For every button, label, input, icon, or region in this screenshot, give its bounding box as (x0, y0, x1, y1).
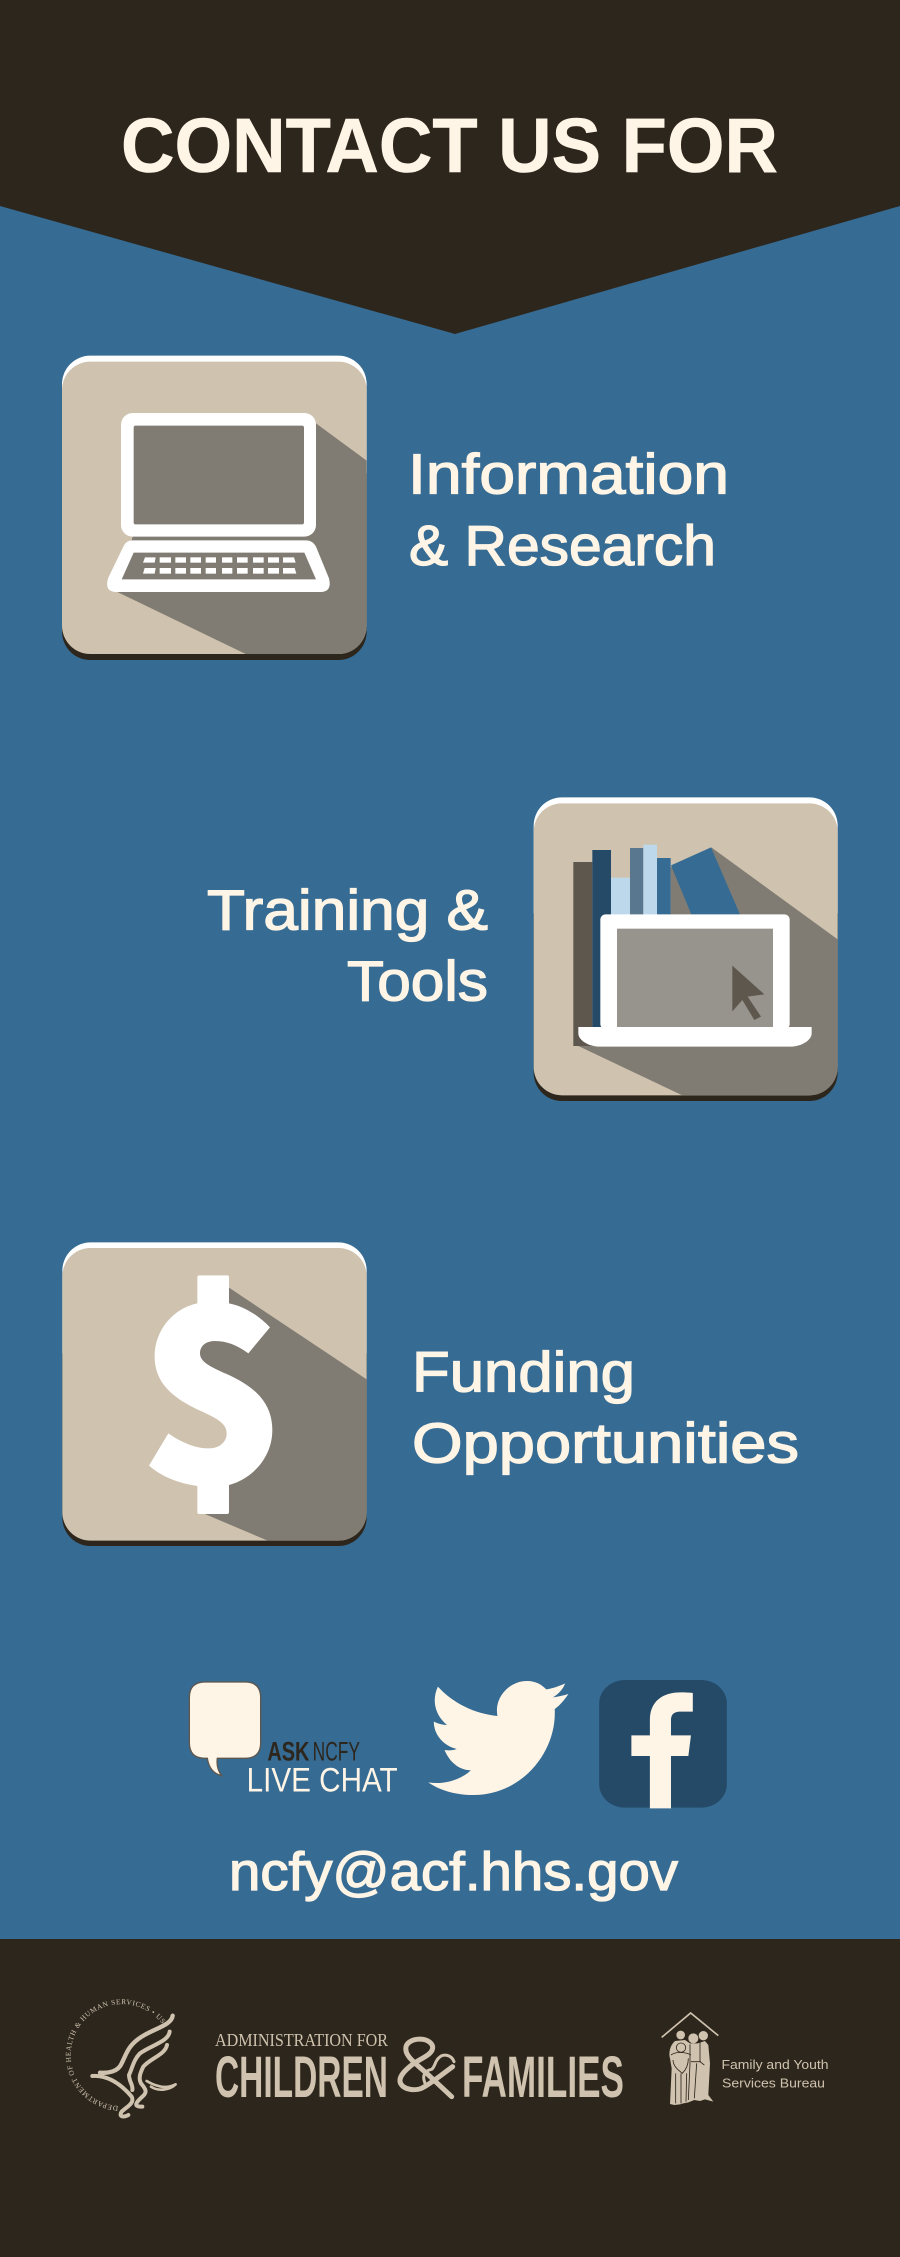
icon: ask ncfy live chat (189, 1682, 398, 1800)
icon: ask ncfy live chat: ASK (267, 1737, 309, 1767)
logo: family and youth services bureau: Family and Youth (722, 2058, 828, 2072)
logo: administration for children and families (215, 2030, 624, 2110)
logo: family and youth services bureau (662, 2013, 828, 2105)
logo: administration for children and families: ADMINISTRATION FOR (215, 2030, 388, 2050)
text: training and tools: Tools (347, 950, 488, 1014)
email address: ncfy@acf.hhs.gov (229, 1842, 678, 1902)
icon: ask ncfy live chat: LIVE CHAT (247, 1762, 398, 1800)
logo: administration for children and families: FAMILIES (462, 2045, 624, 2110)
logo: family and youth services bureau: Services Bureau (722, 2076, 825, 2090)
icon: laptop (62, 356, 367, 660)
text: information and research: & Research (409, 514, 716, 578)
logo: hhs seal: DEPARTMENT OF HEALTH & HUMAN SERVICES • USA (66, 1999, 166, 2111)
footer band (0, 1939, 900, 2257)
text: funding opportunities (412, 1340, 799, 1476)
logo: administration for children and families: CHILDREN (215, 2045, 388, 2110)
icon: twitter bird (428, 1681, 568, 1795)
icon: books and laptop (534, 797, 838, 1101)
text: information and research (408, 442, 729, 578)
title: CONTACT US FOR (121, 103, 778, 189)
icon: dollar sign (62, 1242, 367, 1546)
text: training and tools (207, 878, 488, 1014)
text: funding opportunities: Opportunities (412, 1412, 799, 1476)
icon: facebook (599, 1680, 727, 1808)
icon: ask ncfy live chat: NCFY (313, 1737, 360, 1767)
text: funding opportunities: Funding (412, 1340, 635, 1404)
ampersand (400, 2039, 454, 2097)
text: information and research: Information (408, 442, 729, 506)
text: training and tools: Training & (207, 878, 488, 942)
header banner (0, 0, 900, 334)
